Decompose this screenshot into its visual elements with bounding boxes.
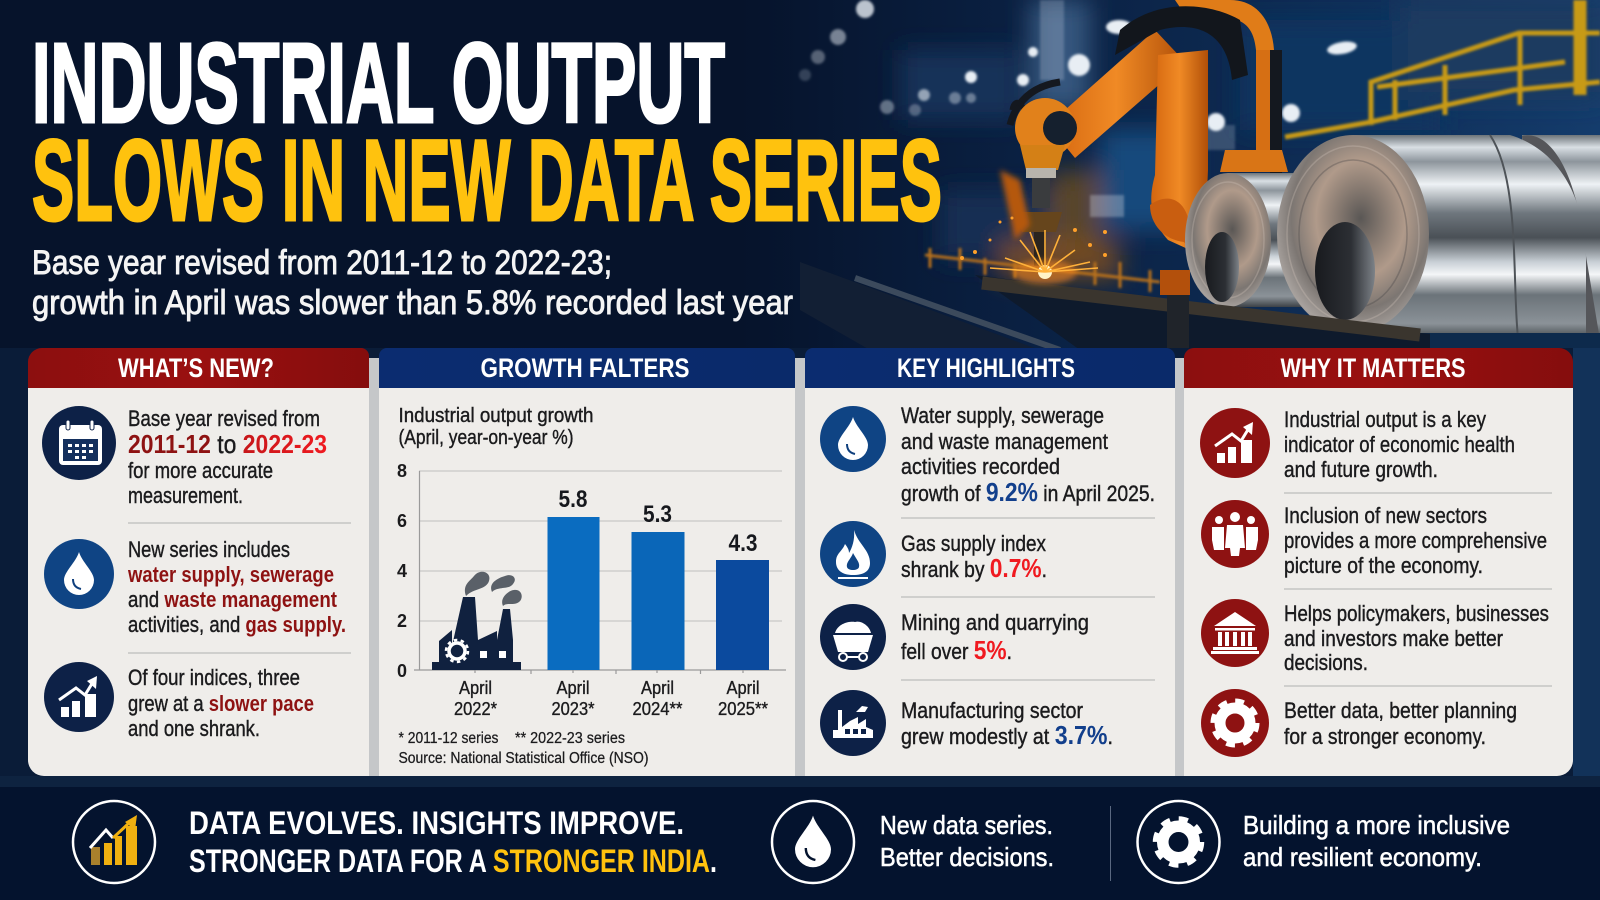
text: mining: fell over 5%. [901,635,1012,665]
text: key indicator: indicator of economic health [1284,432,1515,457]
icon: growth chart [1200,408,1270,478]
icon: mining cart [820,604,886,670]
footer headline [189,805,717,879]
robot arm [1000,0,1288,266]
icon: people [1201,500,1269,568]
text: four indices [128,665,314,741]
text: water supply growth: growth of 9.2% in April 2025. [901,477,1155,507]
text: key indicator: and future growth. [1284,457,1438,482]
footnotes and source: * 2011-12 series [398,730,499,747]
text: manufacturing [901,698,1113,750]
text: resilient economy: and resilient economy. [1243,842,1482,872]
subtitle: Base year revised from 2011-12 to 2022-23; [32,244,612,282]
panel: growth falters [379,348,795,767]
text: policymakers: decisions. [1284,650,1368,675]
x axis labels: April [726,678,760,698]
text: water supply growth [901,403,1155,507]
y axis labels: 8 [397,461,407,481]
text: policymakers: and investors make better [1284,626,1503,651]
yellow safety railing [1285,0,1600,137]
right steel coil [1522,135,1600,340]
icon: gold growth chart [73,801,155,883]
icon: growth chart [44,662,114,732]
bar chart [397,461,786,719]
icon: water drop circle [772,801,854,883]
text: water supply growth: Water supply, sewerage [901,403,1104,428]
icon: gas flame [820,521,886,587]
y axis labels: 2 [397,611,407,631]
footnotes and source: ** 2022-23 series [515,730,625,747]
icon: government building [1201,599,1269,667]
text: better planning: for a stronger economy. [1284,724,1486,749]
text: new series [127,537,346,637]
x axis labels [454,678,768,719]
value labels [558,486,758,557]
text: new sectors: picture of the economy. [1284,553,1483,578]
welding sparks [960,216,1107,284]
y axis labels: 0 [397,661,407,681]
title [32,20,942,245]
footer headline: STRONGER DATA FOR A STRONGER INDIA. [189,843,717,879]
text: base year: Base year revised from [128,406,320,431]
text: new series: New series includes [128,537,290,562]
value labels: 5.3 [643,501,672,528]
text: new series: water supply, sewerage [127,562,334,587]
text: resilient economy [1243,810,1510,872]
surrounds below the hero [0,348,1600,788]
text: key indicator: Industrial output is a key [1284,407,1486,432]
header: why it matters [1184,348,1573,388]
conveyor and factory floor [800,248,1600,350]
text: better planning: Better data, better planning [1284,698,1517,723]
icon: gear [1201,689,1269,757]
footnotes and source: Source: National Statistical Office (NSO) [398,750,648,767]
text: base year [128,406,327,508]
text: gas supply: Gas supply index [901,531,1046,556]
text: mining: Mining and quarrying [901,610,1089,635]
rear steel coil [1185,173,1308,307]
text: new data series: Better decisions. [880,842,1054,872]
icon: calendar [42,406,116,480]
text: water supply growth: and waste management [901,429,1108,454]
main steel coil [1277,135,1586,340]
panel: key highlights [805,348,1175,756]
header: key highlights: KEY HIGHLIGHTS [897,353,1075,383]
text: manufacturing: grew modestly at 3.7%. [901,720,1113,750]
y axis labels [397,461,407,681]
x axis labels: 2023* [552,699,594,719]
text: new data series: New data series. [880,810,1053,840]
panel background and gaps [28,358,1573,776]
x axis labels: 2024** [632,699,682,719]
header: key highlights [805,348,1175,388]
panel: what's new [28,348,369,741]
text: key indicator [1284,407,1515,482]
icon: factory [432,572,522,670]
x axis labels: April [459,678,492,698]
x axis labels: 2022* [454,699,497,719]
icon: water drop [820,406,886,472]
text: new sectors: Inclusion of new sectors [1284,503,1487,528]
value labels: 5.8 [558,486,588,513]
bars [548,517,769,670]
text: water supply growth: activities recorded [901,454,1060,479]
text: manufacturing: Manufacturing sector [901,698,1083,723]
y axis labels: 4 [397,561,407,581]
header: why it matters: WHY IT MATTERS [1280,353,1466,383]
icon: water drop [44,539,114,609]
value labels: 4.3 [728,530,758,557]
icon: manufacturing factory [820,690,886,756]
text: four indices: and one shrank. [128,716,260,741]
x axis labels: April [641,678,674,698]
x axis labels: April [556,678,590,698]
text: new series: activities, and gas supply. [128,612,346,637]
text: gas supply [901,531,1047,583]
y axis labels: 6 [397,511,407,531]
footnotes and source [398,730,648,767]
panel: why it matters [1184,348,1573,757]
subtitle: growth in April was slower than 5.8% recorded last year [32,284,793,322]
header: growth falters [379,348,795,388]
text: four indices: Of four indices, three [128,665,300,690]
text: better planning [1284,698,1517,749]
chart title: Industrial output growth [398,405,594,427]
bokeh ceiling lights [799,0,1358,217]
footer band [0,787,1600,900]
x axis labels: 2025** [718,699,768,719]
title: INDUSTRIAL OUTPUT [32,20,725,146]
header: what's new: WHAT’S NEW? [118,353,274,383]
text: new data series [880,810,1054,872]
text: base year: measurement. [128,483,243,508]
text: new sectors [1284,503,1547,578]
icon: gear circle [1138,801,1220,883]
header: growth falters: GROWTH FALTERS [480,353,690,383]
chart title: (April, year-on-year %) [398,427,574,449]
text: policymakers: Helps policymakers, businesses [1284,601,1549,626]
footer headline: DATA EVOLVES. INSIGHTS IMPROVE. [189,805,684,841]
text: base year: 2011-12 to 2022-23 [128,429,327,459]
hero photo: industrial robot and steel coils [740,0,1600,350]
text: policymakers [1284,601,1549,675]
subtitle [32,244,793,322]
text: new sectors: provides a more comprehensive [1284,528,1547,553]
text: four indices: grew at a slower pace [128,691,314,716]
text: base year: for more accurate [128,458,273,483]
text: mining [901,610,1089,665]
text: resilient economy: Building a more inclusive [1243,810,1510,840]
text: new series: and waste management [128,587,338,612]
header: what's new [28,348,369,388]
chart title [398,405,594,449]
text: gas supply: shrank by 0.7%. [901,553,1047,583]
